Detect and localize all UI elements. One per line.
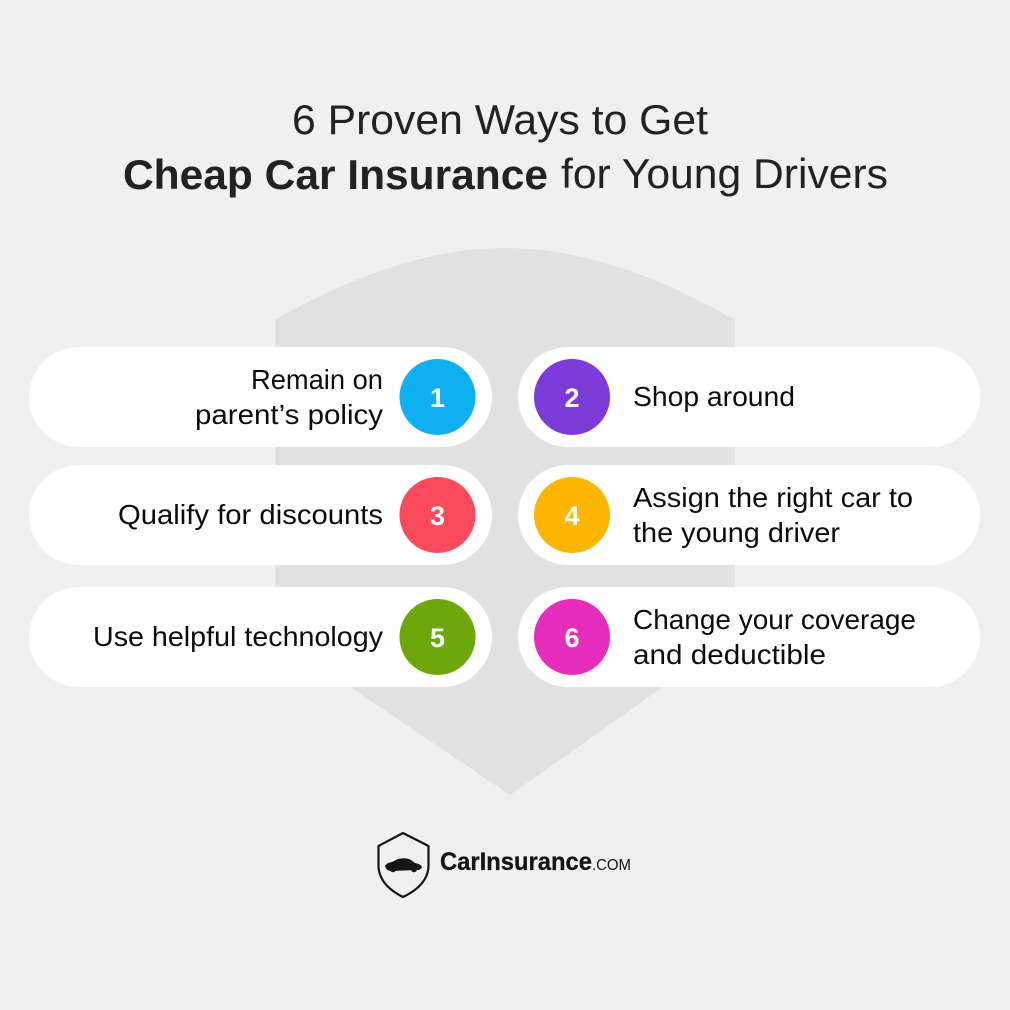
item 5: use helpful technology: 5	[430, 623, 445, 653]
item 4: assign the right car: the young driver	[633, 517, 840, 548]
item 6: change your coverage: and deductible	[633, 639, 826, 670]
item 2: shop around	[518, 347, 980, 447]
item 6: change your coverage: Change your coverage	[633, 604, 916, 635]
title: 6 Proven Ways to Get	[292, 96, 708, 143]
logo	[378, 833, 631, 897]
icon: shield with car	[378, 833, 428, 897]
item 4: assign the right car: 4	[564, 501, 580, 531]
wordmark: .COM	[592, 857, 631, 874]
item 6: change your coverage: 6	[564, 623, 580, 653]
title: Cheap Car Insurance	[123, 151, 548, 198]
item 1: remain on parent's policy: 1	[430, 383, 445, 413]
item 1: remain on parent's policy	[29, 347, 492, 447]
item 5: use helpful technology	[29, 587, 492, 687]
item 4: assign the right car: Assign the right car to	[633, 482, 913, 513]
title	[123, 96, 888, 198]
item 6: change your coverage	[518, 587, 980, 687]
item 3: qualify for discounts: Qualify for discounts	[118, 499, 383, 530]
item 2: shop around: Shop around	[633, 381, 795, 412]
item 4: assign the right car	[518, 465, 980, 565]
wordmark: CarInsurance	[440, 848, 592, 876]
title: for Young Drivers	[561, 150, 888, 197]
item 1: remain on parent's policy: Remain on	[251, 364, 383, 395]
background shield	[275, 248, 735, 795]
item 5: use helpful technology: Use helpful technology	[93, 621, 383, 652]
item 3: qualify for discounts: 3	[430, 501, 445, 531]
item 2: shop around: 2	[564, 383, 580, 413]
item 3: qualify for discounts	[29, 465, 492, 565]
item 1: remain on parent's policy: parent’s policy	[195, 399, 383, 430]
